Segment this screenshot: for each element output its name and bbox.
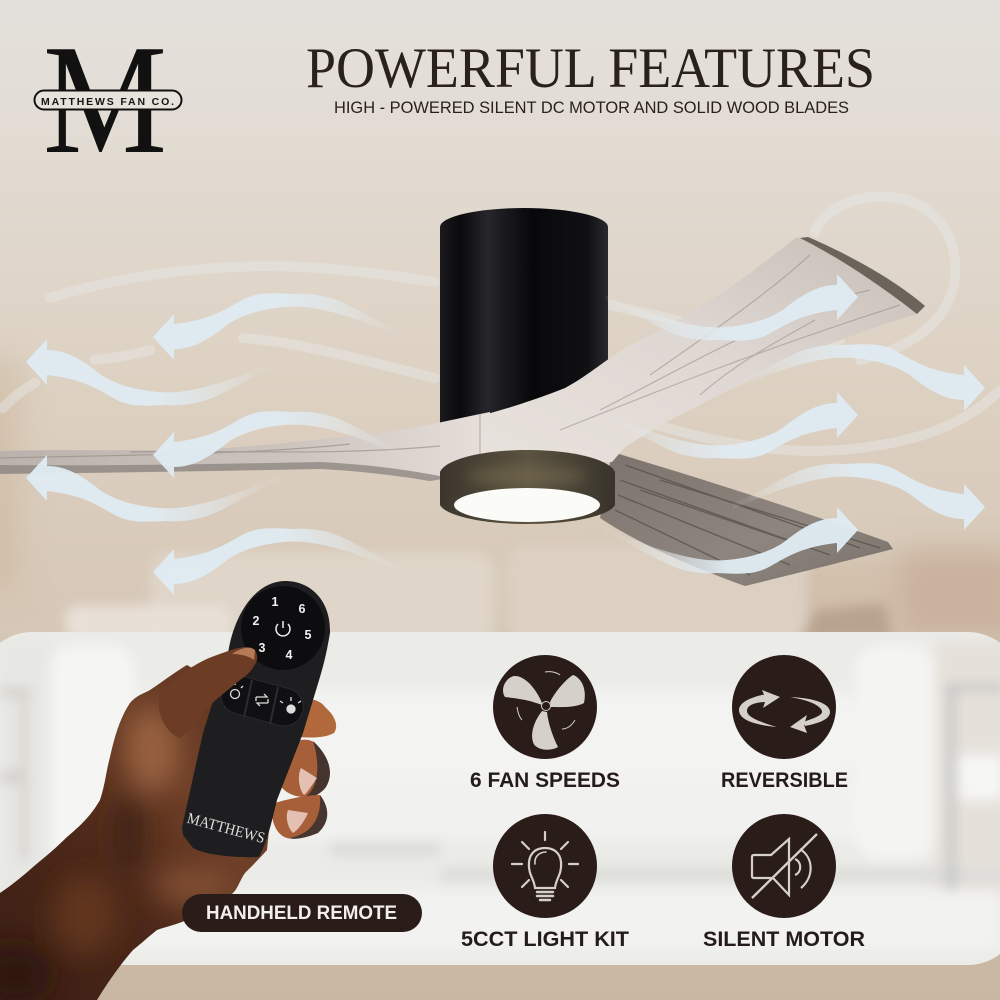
air arrow: left 2 — [26, 339, 278, 406]
black remote control: 6 — [299, 602, 306, 616]
speed dial — [241, 586, 325, 670]
frosted feature panel — [0, 632, 1000, 965]
black remote control: 5 — [305, 628, 312, 642]
handheld remote pill: HANDHELD REMOTE — [206, 903, 397, 924]
function buttons — [217, 672, 307, 730]
air arrow: left 4 — [26, 455, 278, 522]
air arrow: left 5 — [153, 528, 405, 595]
top right wood blade — [480, 237, 925, 462]
logo: M — [43, 12, 167, 186]
title: POWERFUL FEATURES — [306, 37, 875, 100]
light housing — [440, 450, 615, 524]
logo: MATTHEWS FAN CO. — [41, 96, 174, 108]
faint air swirls — [3, 196, 1000, 451]
icon: muted speaker — [732, 814, 836, 918]
bottom wood blade — [600, 452, 893, 586]
subtitle: HIGH - POWERED SILENT DC MOTOR AND SOLID WOOD BLADES — [334, 99, 849, 117]
icon: reverse arrows — [732, 655, 836, 759]
index finger — [298, 699, 336, 738]
air arrow: left 3 — [153, 411, 405, 478]
hand and forearm — [0, 665, 269, 1000]
ceiling fan — [0, 208, 925, 586]
feature: silent motor: SILENT MOTOR — [703, 928, 865, 951]
air arrow: far right lower — [733, 463, 985, 530]
feature: 6 fan speeds: 6 FAN SPEEDS — [470, 769, 620, 792]
feature: silent motor — [703, 814, 865, 951]
handheld remote pill — [182, 894, 422, 932]
thumb — [159, 647, 257, 738]
black remote control: 1 — [272, 595, 279, 609]
power symbol — [276, 621, 290, 636]
thumb nail highlight — [232, 648, 255, 660]
hand holding remote — [0, 581, 336, 1000]
fan motor housing — [440, 208, 608, 430]
left wood blade — [0, 412, 490, 481]
icon: light bulb — [493, 814, 597, 918]
black remote control — [182, 581, 330, 857]
feature: 5cct light kit — [461, 814, 629, 951]
fingers — [272, 699, 336, 839]
air arrow: far right upper — [733, 344, 985, 411]
air arrow: blade bottom — [606, 507, 858, 574]
led light disc — [454, 488, 600, 522]
black remote control: 2 — [253, 614, 260, 628]
middle finger — [280, 740, 330, 797]
feature: 5cct light kit: 5CCT LIGHT KIT — [461, 928, 629, 951]
black remote control: 4 — [286, 648, 293, 662]
black remote control: 3 — [259, 641, 266, 655]
feature: reversible — [721, 655, 848, 792]
feature: reversible: REVERSIBLE — [721, 769, 848, 792]
ring finger — [272, 795, 326, 839]
feature: 6 fan speeds — [470, 655, 620, 792]
air arrow: blade top — [606, 274, 858, 341]
remote brand: MATTHEWS — [185, 810, 267, 847]
air arrow: right middle — [606, 392, 858, 459]
icon: fan — [493, 655, 597, 759]
air arrow: upper left — [153, 293, 405, 360]
